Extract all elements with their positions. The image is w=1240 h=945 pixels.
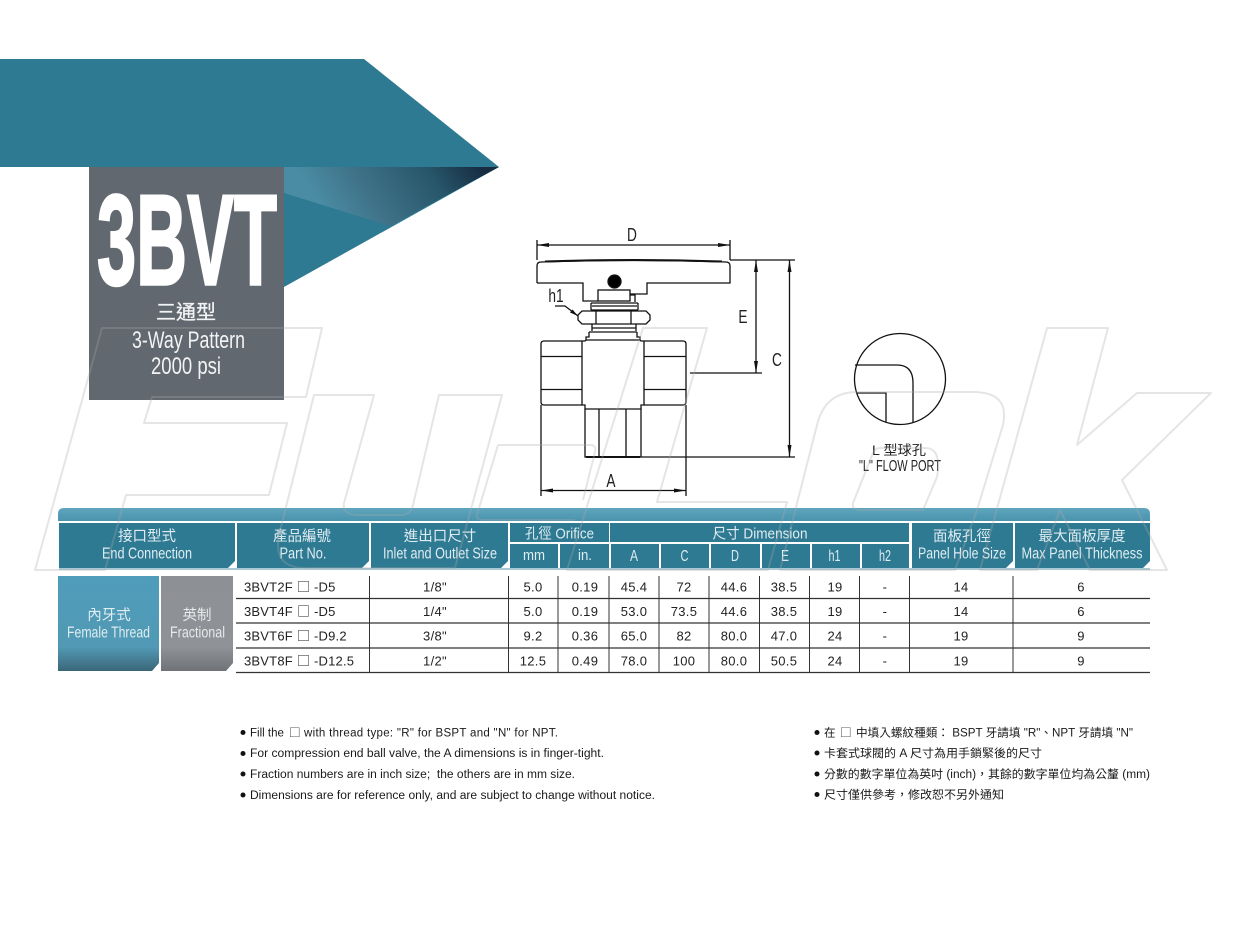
header labels: Part No. bbox=[280, 546, 326, 562]
table row: 3BVT6F: 19 bbox=[953, 628, 969, 644]
table row: 3BVT2F: 6 bbox=[1077, 580, 1085, 594]
header labels: h1 bbox=[828, 548, 841, 565]
header labels bbox=[102, 526, 1143, 565]
table row: 3BVT2F: 0.19 bbox=[572, 580, 598, 594]
table row: 3BVT2F: 3BVT2F bbox=[244, 580, 293, 594]
header labels: A bbox=[630, 548, 638, 565]
dimension arrows bbox=[537, 243, 792, 492]
header labels: 最大面板厚度 bbox=[1038, 528, 1126, 545]
header labels: E bbox=[781, 548, 789, 565]
table row: 3BVT4F: 53.0 bbox=[621, 604, 647, 619]
table row: 3BVT2F: 5.0 bbox=[524, 580, 542, 594]
table row: 3BVT2F: 45.4 bbox=[621, 580, 647, 594]
header labels: 面板孔徑 bbox=[933, 528, 991, 545]
table row: 3BVT8F: 50.5 bbox=[771, 654, 797, 668]
header labels: Panel Hole Size bbox=[918, 546, 1006, 562]
ribbon banner bbox=[0, 59, 499, 287]
notes in English: For compression end ball valve, the A dimensions is in finger-tight. bbox=[250, 748, 604, 760]
table row: 3BVT6F: 9.2 bbox=[524, 628, 542, 644]
notes in Chinese: 卡套式球閥的 A 尺寸為用手鎖緊後的尺寸 bbox=[824, 746, 1042, 760]
table row: 3BVT4F: 73.5 bbox=[671, 604, 697, 619]
valve technical drawing bbox=[537, 225, 795, 496]
header cells bbox=[59, 523, 1150, 568]
table row: 3BVT6F: 82 bbox=[676, 628, 692, 644]
flow port caption bbox=[859, 443, 941, 475]
table row: 3BVT4F: - bbox=[883, 604, 887, 619]
header labels: 產品編號 bbox=[273, 528, 331, 545]
header labels: h2 bbox=[879, 548, 891, 565]
table row: 3BVT8F: - bbox=[883, 654, 887, 668]
table row: 3BVT2F: 1/8" bbox=[423, 580, 447, 594]
row category: fractional bbox=[161, 576, 233, 671]
notes in English bbox=[240, 724, 655, 802]
notes in Chinese: 尺寸僅供參考，修改恕不另外通知 bbox=[824, 788, 1004, 802]
table row: 3BVT6F: 65.0 bbox=[621, 628, 647, 644]
table header bbox=[58, 508, 1150, 570]
title: 3BVT: 3BVT bbox=[97, 168, 277, 312]
header labels: 孔徑 Orifice bbox=[525, 526, 594, 542]
table row: 3BVT6F: 0.36 bbox=[572, 628, 598, 644]
dimension labels: h1 bbox=[548, 286, 564, 307]
table row: 3BVT8F: 100 bbox=[673, 654, 695, 668]
table row: 3BVT8F: 24 bbox=[827, 654, 843, 668]
table row: 3BVT6F bbox=[244, 626, 1085, 644]
row category: fractional: Fractional bbox=[170, 624, 225, 642]
table row: 3BVT4F: 14 bbox=[953, 604, 969, 619]
table row: 3BVT2F: 38.5 bbox=[771, 580, 797, 594]
table row: 3BVT2F: □ bbox=[297, 576, 310, 596]
table row: 3BVT8F: 80.0 bbox=[721, 654, 747, 668]
table row: 3BVT4F: 44.6 bbox=[721, 604, 747, 619]
flow port caption: L 型球孔 bbox=[872, 443, 927, 458]
dimension labels: C bbox=[772, 350, 782, 371]
notes in Chinese: 在 bbox=[824, 726, 836, 740]
header labels: Inlet and Outlet Size bbox=[383, 546, 497, 562]
table row: 3BVT4F: □ bbox=[297, 601, 310, 620]
table row: 3BVT6F: 80.0 bbox=[721, 628, 747, 644]
dimension labels: D bbox=[627, 225, 637, 246]
notes in English: Dimensions are for reference only, and are subject to change without notice. bbox=[250, 790, 655, 802]
notes in English: Fill the bbox=[250, 728, 284, 740]
watermark logo outline bbox=[35, 328, 1211, 570]
table row: 3BVT8F: □ bbox=[297, 650, 310, 670]
table row: 3BVT4F: 3BVT4F bbox=[244, 604, 293, 619]
header labels: End Connection bbox=[102, 546, 192, 562]
table row: 3BVT6F: 24 bbox=[827, 628, 843, 644]
table row: 3BVT2F: - bbox=[883, 580, 887, 594]
table row: 3BVT8F: 12.5 bbox=[520, 654, 546, 668]
table row: 3BVT6F: - bbox=[883, 628, 887, 644]
table row: 3BVT6F: 47.0 bbox=[771, 628, 797, 644]
row category: female thread: 內牙式 bbox=[87, 607, 131, 624]
subtitle: pattern and pressure: 2000 psi bbox=[151, 353, 221, 380]
row category: female thread bbox=[58, 576, 159, 671]
handle bbox=[537, 260, 730, 302]
title panel bbox=[89, 167, 284, 400]
flow port caption: "L" FLOW PORT bbox=[859, 458, 941, 475]
table row: 3BVT6F: 3BVT6F bbox=[244, 628, 293, 644]
subtitle: pattern and pressure: 3-Way Pattern bbox=[132, 327, 245, 354]
table row: 3BVT2F: 19 bbox=[827, 580, 843, 594]
header labels: 接口型式 bbox=[118, 528, 176, 545]
row category: fractional: 英制 bbox=[182, 607, 212, 624]
table row: 3BVT8F: 3BVT8F bbox=[244, 654, 293, 668]
table row: 3BVT2F: 44.6 bbox=[721, 580, 747, 594]
table row: 3BVT6F: 3/8" bbox=[423, 628, 447, 644]
table row: 3BVT4F: 0.19 bbox=[572, 604, 598, 619]
table row: 3BVT2F bbox=[244, 576, 1085, 596]
table row: 3BVT4F: -D5 bbox=[314, 604, 336, 619]
table row: 3BVT6F: -D9.2 bbox=[314, 628, 347, 644]
table row: 3BVT4F: 38.5 bbox=[771, 604, 797, 619]
table row: 3BVT4F: 6 bbox=[1077, 604, 1085, 619]
notes in English: Fraction numbers are in inch size; the others are in mm size. bbox=[250, 769, 575, 781]
dimension labels: A bbox=[606, 471, 616, 492]
table row: 3BVT2F: 14 bbox=[953, 580, 969, 594]
header labels: C bbox=[680, 548, 688, 565]
table row: 3BVT8F: 78.0 bbox=[621, 654, 647, 668]
header top bar bbox=[58, 508, 1150, 521]
header labels: mm bbox=[523, 548, 545, 564]
L flow port diagram bbox=[854, 334, 946, 475]
dimension labels: E bbox=[738, 307, 748, 328]
subtitle: pattern and pressure: 三通型 bbox=[156, 301, 216, 324]
table row: 3BVT8F: 9 bbox=[1077, 654, 1085, 668]
table row: 3BVT4F: 1/4" bbox=[423, 604, 447, 619]
row category: female thread: Female Thread bbox=[67, 624, 150, 642]
notes in English: with thread type: "R" for BSPT and "N" for NPT. bbox=[303, 728, 558, 740]
subtitle: pattern and pressure bbox=[132, 301, 245, 380]
notes in Chinese: □ bbox=[840, 724, 852, 740]
table grid bbox=[236, 576, 1150, 672]
header labels: in. bbox=[578, 548, 592, 564]
table row: 3BVT4F: 19 bbox=[827, 604, 843, 619]
notes in Chinese: 中填入螺紋種類： BSPT 牙請填 "R"、NPT 牙請填 "N" bbox=[856, 726, 1133, 740]
table row: 3BVT8F: -D12.5 bbox=[314, 654, 354, 668]
table row: 3BVT8F: 19 bbox=[953, 654, 969, 668]
table row: 3BVT4F bbox=[244, 601, 1085, 620]
header labels: 尺寸 Dimension bbox=[712, 526, 808, 542]
header labels: D bbox=[731, 548, 739, 565]
stem and hex nut bbox=[578, 303, 650, 340]
table row: 3BVT4F: 5.0 bbox=[524, 604, 542, 619]
header labels: Max Panel Thickness bbox=[1022, 546, 1143, 562]
table row: 3BVT2F: -D5 bbox=[314, 580, 336, 594]
dimension lines bbox=[537, 240, 795, 496]
table row: 3BVT2F: 72 bbox=[676, 580, 692, 594]
header labels: 進出口尺寸 bbox=[404, 528, 476, 545]
table row: 3BVT8F bbox=[244, 650, 1085, 670]
table row: 3BVT8F: 0.49 bbox=[572, 654, 598, 668]
dimension labels bbox=[548, 225, 782, 492]
table row: 3BVT6F: 9 bbox=[1077, 628, 1085, 644]
valve body with ports bbox=[541, 340, 686, 457]
notes in English: □ bbox=[289, 724, 300, 740]
table row: 3BVT8F: 1/2" bbox=[423, 654, 447, 668]
notes in Chinese bbox=[814, 724, 1150, 802]
notes in Chinese: 分數的數字單位為英吋 (inch)，其餘的數字單位均為公釐 (mm) bbox=[824, 767, 1150, 781]
table row: 3BVT6F: □ bbox=[297, 626, 310, 644]
